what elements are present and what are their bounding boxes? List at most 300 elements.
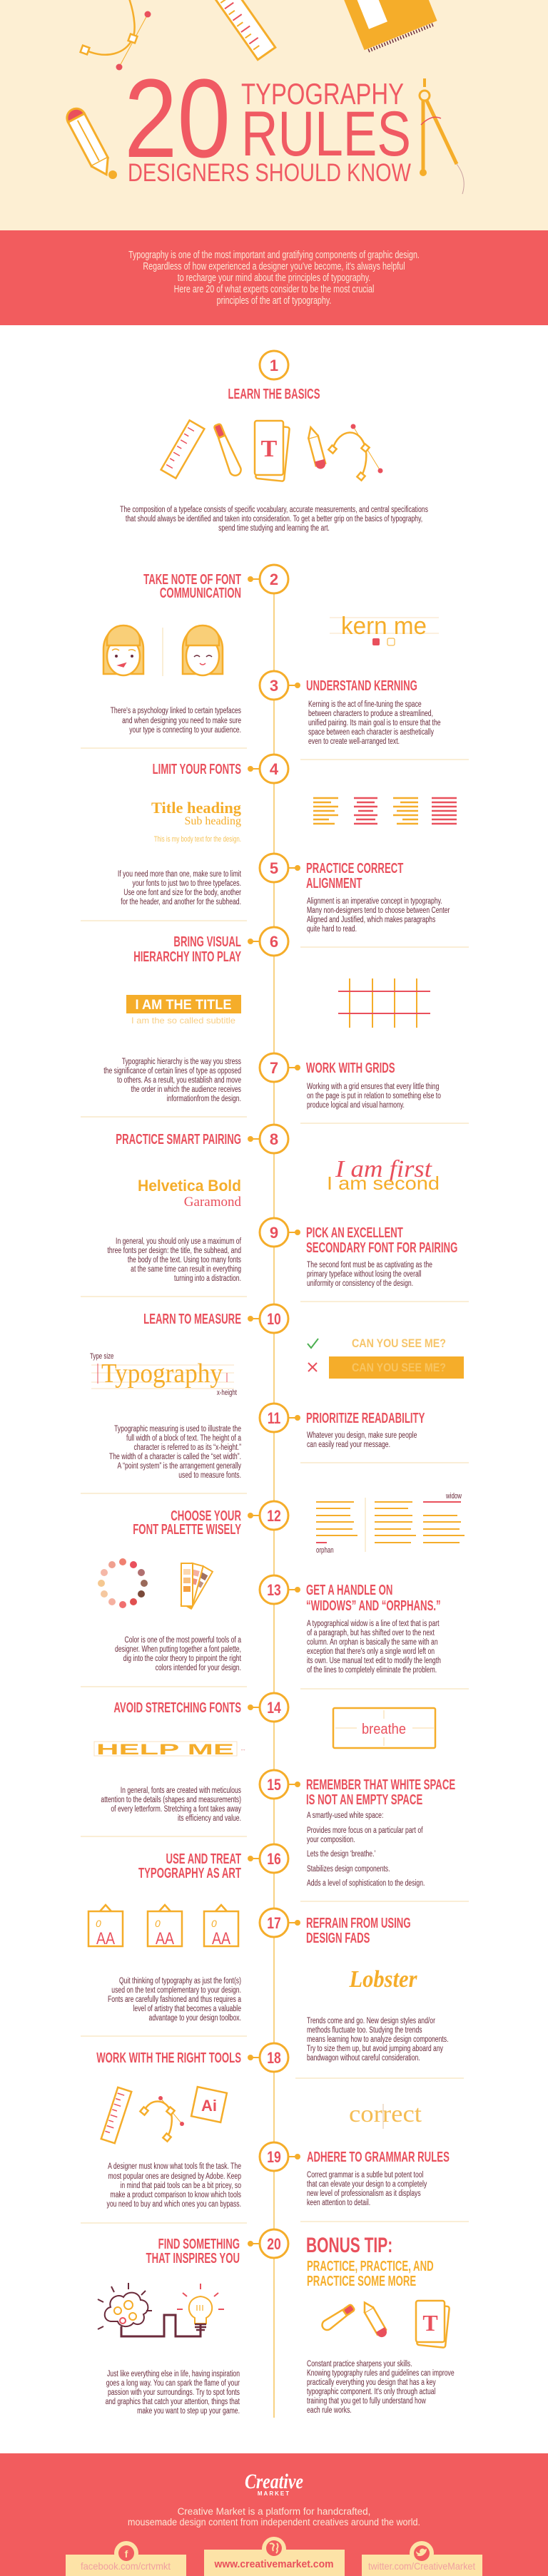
heading 12 [133,1508,242,1538]
heading 9 [306,1225,457,1256]
text 18: in mind that paid tools can be a bit pricey, so [120,2182,241,2190]
heading 12: CHOOSE YOUR [171,1508,241,1524]
number circle 11 [260,1404,300,1432]
number circle 14 [248,1693,288,1722]
heading 13: GET A HANDLE ON [306,1582,392,1598]
text 11 [307,1431,417,1449]
text 3: space between each character is aesthetically [308,728,435,737]
rule 4 [118,755,288,906]
number circle 11: 11 [268,1410,280,1428]
number circle 19: 19 [267,2149,281,2167]
heading 5: PRACTICE CORRECT [306,860,404,876]
icon: compass header [420,78,464,194]
text 9: uniformity or consistency of the design. [307,1279,413,1288]
text 3: Kerning is the act of fine-tuning the space [308,700,422,709]
text 20: passion with your surroundings. Try to spot fonts [108,2388,240,2397]
bonus subheading: PRACTICE, PRACTICE, AND [307,2258,434,2274]
text 6 [103,1058,241,1103]
rule 9 [260,1156,457,1288]
text 2 [111,707,241,735]
title [124,56,411,187]
breathe box [333,1708,435,1748]
heading 6 [133,934,242,965]
typography measure graphic: Typography [101,1359,223,1389]
text 13: column. An orphan is basically the same with an [307,1638,438,1647]
number circle 4: 4 [270,760,279,778]
text 13 [307,1620,441,1675]
text 20: goes a long way. You can spark the flame of your [106,2379,240,2388]
text 8: the body of the text. Using too many fonts [128,1256,241,1264]
font hierarchy sample: Sub heading [184,815,241,827]
link: twitter [362,2541,482,2576]
heading 11: PRIORITIZE READABILITY [306,1410,425,1426]
text 15: Lets the design ‘breathe.’ [307,1850,375,1859]
icon: brain to bulb [98,2283,224,2336]
font hierarchy sample [151,799,241,844]
text 16 [108,1977,241,2023]
icon: pencil header [64,106,115,179]
typography measure graphic: x-height [217,1389,237,1397]
number circle 18: 18 [267,2050,281,2068]
text 1 [120,506,428,533]
title box sample: I AM THE TITLE [136,998,231,1013]
intro band [0,230,548,325]
text 16: level of artistry that becomes a valuable [133,2005,241,2013]
text 15: Adds a level of sophistication to the design. [307,1879,425,1888]
heading 17: DESIGN FADS [306,1930,370,1946]
heading 13 [306,1582,441,1614]
intro band: Typography is one of the most important and gratifying components of graphic design. [128,248,420,260]
text 14: In general, fonts are created with meticulous [121,1787,241,1795]
readability sample: CAN YOU SEE ME? [352,1361,446,1374]
text 6: the significance of certain lines of type as opposed [103,1067,241,1075]
text 6: to others. As a result, you establish and move [117,1076,241,1085]
icon: art frames: AA [156,1929,174,1948]
bonus tip [306,2234,455,2415]
rule 8 [108,1125,288,1283]
text 16: advantage to your design toolbox. [149,2014,241,2023]
heading 16: USE AND TREAT [166,1851,242,1867]
text 13: A typographical widow is a line of text that is part [307,1620,440,1628]
number circle 9: 9 [270,1224,278,1242]
icons: tools row [161,420,382,481]
icons: brush pencil T [320,2300,450,2348]
heading 14: AVOID STRETCHING FONTS [113,1700,241,1716]
text 10: full width of a block of text. The height of a [126,1434,241,1443]
title: 20 [124,56,230,181]
number circle 4 [248,755,288,783]
help me stretched [94,1742,246,1758]
number circle 3 [260,671,300,700]
heading 1: LEARN THE BASICS [228,386,320,402]
font pairing sample: Garamond [184,1195,241,1210]
rule 6 [103,927,288,1103]
text 10 [109,1425,242,1480]
rule 7 [260,978,441,1110]
text 15: A smartly-used white space: [307,1811,383,1820]
text 9: The second font must be as captivating as the [307,1261,432,1269]
help me stretched: HELP ME [96,1742,234,1758]
icon: art frames [88,1905,238,1948]
rule 20 [98,2229,288,2416]
readability sample: CAN YOU SEE ME? [352,1336,446,1350]
link: website [204,2537,345,2576]
number circle 15 [260,1770,300,1799]
intro band: Here are 20 of what experts consider to be the most crucial [174,282,374,295]
number circle 2 [248,565,288,593]
rule 10 [90,1304,464,1480]
text 3: even to create well-arranged text. [308,737,400,746]
text 1: that should always be identified and taken into consideration. To get a better grip on the basics of typography, [126,515,422,523]
text 5: quite hard to read. [307,925,357,934]
text 4: for the header, and another for the subhead. [121,898,241,906]
heading 2: COMMUNICATION [160,585,241,601]
icon: swatches [181,1563,213,1609]
text 18: most popular ones are designed by Adobe. Keep [108,2172,241,2181]
icon: art frames: 0 [96,1918,101,1929]
text 8 [108,1237,241,1283]
number circle 20 [248,2229,288,2258]
text 14: its efficiency and value. [178,1814,241,1823]
breathe box: breathe [362,1722,406,1737]
text 9: primary typeface without losing the overall [307,1270,422,1279]
widow orphan graphic: orphan [316,1546,334,1555]
bonus text: each rule works. [307,2406,352,2415]
text 17: methods fluctuate too. Studying the trends [307,2026,422,2035]
bonus text: practically everything you design that has a key [307,2378,436,2387]
number circle 20: 20 [267,2236,281,2254]
heading 15 [306,1777,455,1808]
text 15: your composition. [307,1836,355,1844]
text 12: designer. When putting together a font palette, [115,1645,241,1654]
text 4: your fonts to just two to three typefaces. [133,879,241,888]
icons: tools row: T [261,436,278,462]
heading 17 [306,1915,411,1946]
heading 7: WORK WITH GRIDS [306,1060,395,1076]
heading 9: SECONDARY FONT FOR PAIRING [306,1240,457,1256]
text 2: and when designing you need to make sure [122,717,241,725]
title: DESIGNERS SHOULD KNOW [128,159,411,187]
number circle 15: 15 [267,1777,281,1794]
text 5 [307,897,450,934]
title box sample: I am the so called subtitle [131,1016,235,1026]
number circle 5 [260,854,300,882]
icon: ruler header [208,0,275,60]
number circle 1 [260,351,288,379]
text 7: Working with a grid ensures that every little thing [307,1083,440,1091]
icon: art frames: AA [212,1929,230,1948]
typography measure graphic [90,1352,237,1397]
number circle 7: 7 [270,1059,278,1077]
rule 13 [260,1575,441,1675]
text 17: means learning how to analyze design components. [307,2035,449,2044]
text 15: Provides more focus on a particular part of [307,1826,423,1835]
heading 4: LIMIT YOUR FONTS [153,761,241,777]
text 18 [107,2162,241,2209]
kern me graphic: kern me [341,613,427,640]
text 16: Fonts are carefully fashioned and thus requires a [108,1995,241,2004]
title box sample [126,995,241,1026]
text 12: colors intended for your design. [156,1664,241,1672]
number circle 6 [248,927,288,956]
heading 13: “WIDOWS” AND “ORPHANS.” [306,1598,441,1614]
icons: brush pencil T: T [422,2310,438,2336]
number circle 5: 5 [270,859,278,877]
link: website: www.creativemarket.com [214,2558,334,2570]
text 19: that can elevate your design to a completely [307,2180,427,2189]
font hierarchy sample: This is my body text for the design. [154,835,241,844]
heading 9: PICK AN EXCELLENT [306,1225,403,1241]
text 10: Typographic measuring is used to illustrate the [114,1425,241,1433]
text 6: informationfrom the design. [166,1095,241,1103]
number circle 12: 12 [267,1508,281,1525]
heading 12: FONT PALETTE WISELY [133,1521,242,1538]
text 13: of a paragraph, but has shifted over to the next [307,1629,435,1637]
icon: notebook header [340,0,438,52]
number circle 8 [248,1125,288,1153]
number circle 13 [260,1575,300,1604]
text 6: the order in which the audience receives [131,1085,241,1094]
text 4: If you need more than one, make sure to limit [118,870,241,879]
readability sample [308,1336,464,1379]
heading 15: IS NOT AN EMPTY SPACE [306,1792,422,1808]
heading 19: ADHERE TO GRAMMAR RULES [307,2149,450,2165]
icon: art frames: 0 [155,1918,161,1929]
font pairing script sample: I am first [335,1156,433,1182]
text 4: Use one font and size for the body, another [123,889,241,897]
icon: art frames: 0 [211,1918,217,1929]
number circle 10: 10 [267,1311,281,1329]
number circle 17: 17 [267,1915,281,1933]
text 15: Stabilizes design components. [307,1865,390,1874]
intro band: principles of the art of typography. [217,294,331,306]
intro band: Regardless of how experienced a designer you've become, it's always helpful [143,260,405,272]
text 1: spend time studying and learning the art. [218,524,330,533]
number circle 16: 16 [267,1851,281,1869]
heading 15: REMEMBER THAT WHITE SPACE [306,1777,455,1793]
help me stretched: ↔ [240,1745,246,1752]
header background [0,0,548,230]
rule 11 [260,1404,425,1449]
number circle 19 [260,2142,300,2171]
font pairing sample: Helvetica Bold [138,1177,241,1195]
bonus text: Knowing typography rules and guidelines can improve [307,2369,455,2378]
footer text: mousemade design content from independent creatives around the world. [128,2517,420,2528]
text 13: of the lines to completely eliminate the problem. [307,1666,437,1675]
icon: grid [338,978,430,1028]
text 4 [118,870,241,906]
intro band: to recharge your mind about the principles of typography. [178,271,370,283]
text 18: make a product comparison to know which tools [110,2191,241,2199]
text 8: three fonts per design: the title, the subhead, and [108,1247,241,1255]
text 18: A designer must know what tools fit the task. The [108,2162,241,2171]
text 9 [307,1261,432,1288]
icon: tools: Ai [201,2097,217,2115]
heading 8: PRACTICE SMART PAIRING [116,1131,241,1148]
heading 5 [306,860,404,891]
text 5: Alignment is an imperative concept in typography. [307,897,442,906]
heading 6: HIERARCHY INTO PLAY [133,949,242,965]
text 7: produce logical and visual harmony. [307,1101,405,1110]
text 7: on the page is put in relation to something else to [307,1092,441,1100]
text 20 [106,2370,240,2416]
text 11: can easily read your message. [307,1441,390,1449]
font hierarchy sample: Title heading [151,799,241,817]
text 16: Quit thinking of typography as just the font(s) [119,1977,241,1985]
icon: alignment samples [313,798,457,824]
number circle 16 [248,1844,288,1873]
logo: creative market: Creative [245,2470,303,2493]
widow orphan graphic [316,1492,465,1555]
number circle 7 [260,1053,300,1082]
text 17 [307,2017,449,2063]
link: twitter: twitter.com/CreativeMarket [368,2560,475,2572]
font pairing script sample: I am second [327,1172,440,1194]
text 19: keen attention to detail. [307,2199,370,2207]
dividers [81,748,469,2223]
text 14: of every letterform. Stretching a font takes away [111,1805,242,1814]
number circle 8: 8 [270,1130,278,1148]
text 19: new level of professionalism as it displays [307,2189,421,2198]
text 7 [307,1083,441,1110]
rule 15 [260,1708,455,1888]
link: facebook [66,2541,186,2576]
rule 19 [260,2101,450,2207]
text 2: your type is connecting to your audience. [129,726,241,735]
text 10: used to measure fonts. [178,1471,241,1480]
number circle 13: 13 [267,1582,281,1600]
rule 3 [260,613,441,746]
heading 16 [138,1851,242,1881]
text 17: Trends come and go. New design styles and/or [307,2017,435,2025]
text 19: Correct grammar is a subtle but potent tool [307,2171,423,2179]
heading 6: BRING VISUAL [173,934,241,950]
typography measure graphic: Type size [90,1352,113,1361]
text 12 [115,1636,241,1672]
font pairing sample [138,1177,241,1210]
icon: color wheel [98,1558,148,1608]
icon: bezier curve header [81,0,151,70]
rule 5 [260,798,457,934]
text 8: at the same time can result in everything [131,1265,241,1274]
heading 20 [146,2236,240,2266]
link: facebook: facebook.com/crtvmkt [81,2560,171,2572]
text 10: The width of a character is called the “set width”. [109,1453,241,1461]
footer [0,2453,548,2576]
correct sample: correct [349,2101,422,2127]
bonus subheading: PRACTICE SOME MORE [307,2273,416,2289]
icon: art frames: AA [96,1929,115,1948]
heading 18: WORK WITH THE RIGHT TOOLS [96,2050,241,2066]
text 18: you need to buy and which ones you can bypass. [107,2200,241,2209]
rule 18 [96,2043,288,2209]
rule 1: learn the basics [120,351,428,533]
text 17: Try to size them up, but avoid jumping aboard any [307,2045,444,2053]
footer text [128,2506,420,2528]
number circle 12 [248,1501,288,1530]
bonus text: Constant practice sharpens your skills. [307,2360,412,2368]
number circle 14: 14 [267,1700,281,1717]
text 10: character is referred to as its “x-height.” [133,1443,241,1452]
number circle 3: 3 [270,677,278,695]
text 15 [307,1811,425,1888]
bonus text [307,2360,455,2415]
heading 20: THAT INSPIRES YOU [146,2250,240,2266]
bonus text: typographic component. It's only through actual [307,2388,435,2396]
logo: creative market: MARKET [258,2490,290,2497]
title: TYPOGRAPHY [241,77,404,111]
font pairing script sample [327,1156,440,1194]
rule 14 [94,1693,288,1823]
footer text: Creative Market is a platform for handcrafted, [178,2506,370,2517]
text 3: between characters to produce a streamlined, [308,710,433,718]
text 20: make you want to step up your game. [137,2407,240,2416]
text 12: Color is one of the most powerful tools of a [125,1636,241,1645]
heading 2: TAKE NOTE OF FONT [143,571,242,588]
kern me graphic [330,613,439,645]
number circle 10 [248,1304,288,1333]
widow orphan graphic: widow [445,1492,462,1501]
text 8: turning into a distraction. [174,1274,241,1283]
heading 20: FIND SOMETHING [158,2236,240,2252]
number circle 6: 6 [270,933,278,951]
link: facebook: f [125,2548,128,2560]
bonus subheading [307,2258,434,2289]
text 3 [308,700,441,746]
rule 2 [103,565,288,735]
heading 10: LEARN TO MEASURE [143,1311,241,1327]
text 10: A “point system” is the arrangement generally [117,1462,242,1471]
text 2: There's a psychology linked to certain typefaces [111,707,241,715]
text 17: bandwagon without careful consideration. [307,2054,420,2063]
text 14: attention to the details (shapes and measurements) [101,1796,241,1804]
text 11: Whatever you design, make sure people [307,1431,417,1440]
text 20: Just like everything else in life, having inspiration [107,2370,240,2378]
number circle 2: 2 [270,571,278,588]
text 13: its own. Use manual text edit to modify the length [307,1657,441,1665]
text 6: Typographic hierarchy is the way you stress [122,1058,241,1066]
heading 17: REFRAIN FROM USING [306,1915,411,1931]
rule 12 [98,1492,465,1672]
icon: faces [103,625,223,676]
rule 17 [260,1908,449,2063]
lobster sample: Lobster [349,1966,417,1993]
number circle 9 [260,1218,300,1247]
bonus heading: BONUS TIP: [306,2234,392,2257]
text 12: dig into the color theory to pinpoint the right [123,1655,241,1663]
heading 2 [143,571,242,601]
text 3: unified pairing. Its main goal is to ensure that the [308,719,441,727]
heading 16: TYPOGRAPHY AS ART [138,1865,241,1881]
bonus text: training that you get to fully understand how [307,2397,426,2406]
number circle 1: 1 [270,357,278,374]
text 14 [101,1787,242,1823]
text 16: used on the text complementary to your design. [111,1986,241,1995]
text 13: exception that there's only a single word left on [307,1647,435,1656]
text 8: In general, you should only use a maximum of [116,1237,241,1246]
number circle 18 [248,2043,288,2072]
number circle 17 [260,1908,300,1937]
text 5: Aligned and Justified, which makes paragraphs [307,916,435,924]
text 1: The composition of a typeface consists of specific vocabulary, accurate measurements, and central specifications [120,506,428,514]
timeline line [273,579,275,2418]
text 19 [307,2171,427,2207]
title: RULES [241,98,411,169]
rule 16 [88,1844,288,2023]
icon: tools [101,2087,227,2143]
heading 5: ALIGNMENT [306,875,362,891]
heading 3: UNDERSTAND KERNING [306,678,417,694]
